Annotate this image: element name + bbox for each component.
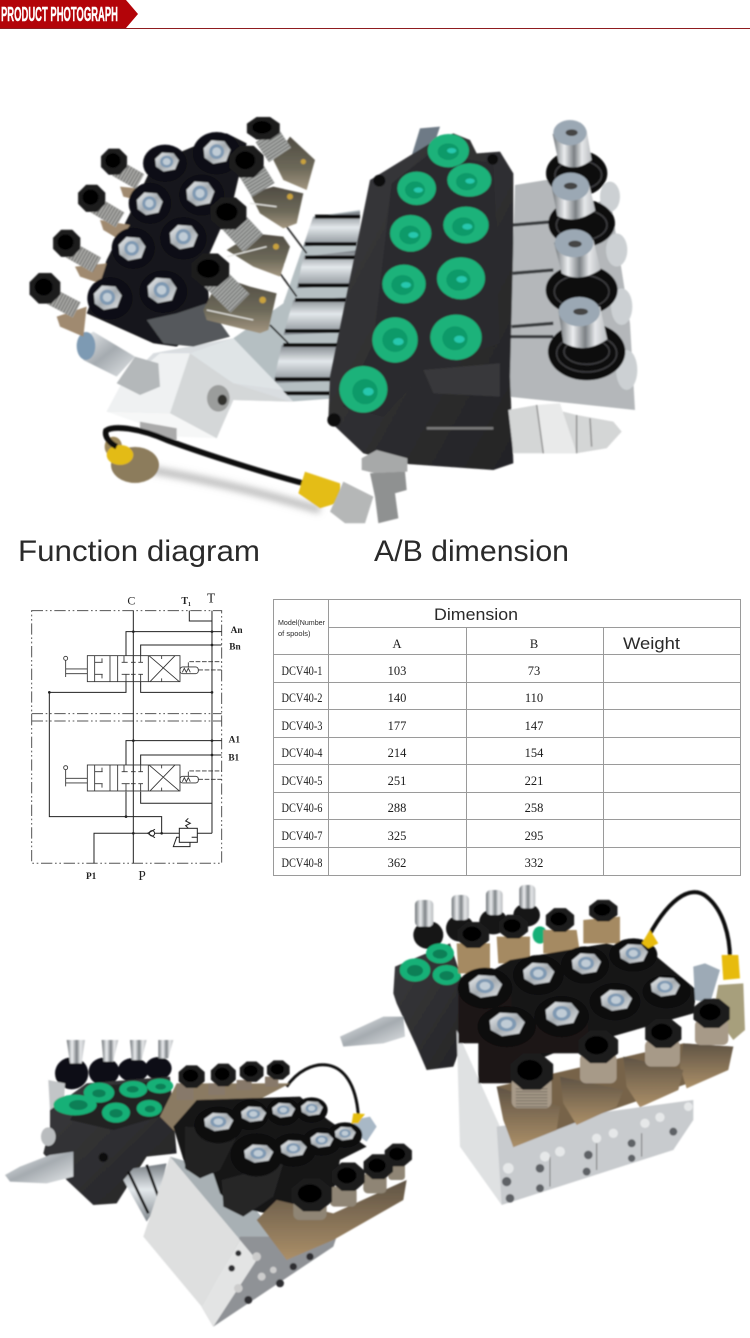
header cells: Weight xyxy=(623,634,680,653)
data rows: DCV40-2 xyxy=(282,691,322,705)
directional valve xyxy=(327,120,637,523)
data rows: 288 xyxy=(388,801,406,815)
data rows xyxy=(282,664,544,870)
cast body xyxy=(43,1077,177,1205)
manifold block xyxy=(457,1030,693,1205)
valve symbol lower xyxy=(64,765,222,791)
spool knobs xyxy=(413,885,540,949)
side bolt xyxy=(340,1017,405,1047)
heading: function diagram: Function diagram xyxy=(18,535,260,568)
spool knobs and rubber boots xyxy=(546,120,625,380)
data rows: DCV40-4 xyxy=(282,746,323,760)
data rows: 154 xyxy=(525,746,544,760)
heading: A/B dimension: A/B dimension xyxy=(374,535,569,568)
dimension table xyxy=(274,600,740,876)
data rows: 325 xyxy=(388,829,406,843)
rear stud xyxy=(408,127,440,167)
data rows: 251 xyxy=(388,774,406,788)
upper connectors xyxy=(457,900,620,973)
manifold block xyxy=(143,1157,337,1327)
side bolt xyxy=(508,403,622,453)
valve symbol upper xyxy=(64,656,222,682)
port labels: P1 xyxy=(86,872,97,882)
header cells: Model(Number xyxy=(278,618,325,627)
port labels: Bn xyxy=(229,643,242,653)
front connectors xyxy=(257,1144,412,1260)
rear connectors xyxy=(160,1060,290,1137)
rods xyxy=(123,1163,167,1222)
data rows: 73 xyxy=(528,664,540,678)
data rows: DCV40-8 xyxy=(282,856,322,870)
table grid xyxy=(274,600,740,876)
left connectors xyxy=(30,149,153,337)
front connectors xyxy=(497,999,733,1147)
yellow fitting xyxy=(298,472,342,508)
right connectors xyxy=(191,117,315,333)
green caps xyxy=(400,926,547,985)
data rows: 177 xyxy=(388,719,406,733)
port labels: T₁ xyxy=(181,596,191,607)
side bolt xyxy=(5,1127,108,1183)
port labels: P xyxy=(138,868,146,883)
data rows: 147 xyxy=(525,719,543,733)
port labels: T xyxy=(207,590,215,605)
data rows: DCV40-3 xyxy=(282,719,322,733)
data rows: DCV40-1 xyxy=(282,664,322,678)
port labels: An xyxy=(231,626,243,636)
hydraulic function diagram xyxy=(32,590,243,883)
outer boundary xyxy=(32,611,222,863)
bottom elbow fitting xyxy=(330,450,407,523)
hose xyxy=(106,428,303,483)
green caps xyxy=(53,1079,173,1123)
data rows: 110 xyxy=(525,691,543,705)
data rows: DCV40-5 xyxy=(282,774,322,788)
header cells: of spools) xyxy=(278,629,311,638)
brass fitting xyxy=(105,437,159,483)
green port caps xyxy=(339,134,491,413)
yellow fittings and plug xyxy=(642,930,745,1040)
cast body xyxy=(393,943,473,1070)
header cells xyxy=(278,605,680,653)
hose shadow xyxy=(133,467,320,510)
data rows: DCV40-7 xyxy=(282,829,322,843)
silver valve sections xyxy=(508,179,637,410)
data rows: 103 xyxy=(388,664,406,678)
port labels: A1 xyxy=(229,735,240,745)
solenoid coils xyxy=(173,1097,367,1217)
solenoid valve assembly xyxy=(30,117,360,510)
data rows: 214 xyxy=(388,746,407,760)
data rows: DCV40-6 xyxy=(282,801,322,815)
header banner: product photograph xyxy=(0,0,750,29)
solenoid coils xyxy=(458,938,697,1083)
main product photo xyxy=(30,117,637,523)
data rows: 362 xyxy=(388,856,406,870)
cast body xyxy=(328,133,513,470)
check and relief valve xyxy=(148,818,197,847)
hose xyxy=(287,1065,358,1115)
lower right product photo xyxy=(340,885,745,1205)
header cells: B xyxy=(530,637,538,651)
data rows: 295 xyxy=(525,829,543,843)
port labels: C xyxy=(127,593,135,607)
hose xyxy=(645,892,730,958)
coil block xyxy=(87,133,247,347)
header cells: Dimension xyxy=(434,605,518,624)
coil caps xyxy=(87,132,241,320)
hydraulic cylinders xyxy=(270,212,360,393)
junction dots xyxy=(48,630,213,835)
header banner: product photograph: PRODUCT PHOTOGRAPH xyxy=(1,4,118,26)
spool knobs xyxy=(55,1040,173,1089)
plug and fitting xyxy=(77,332,160,395)
data rows: 221 xyxy=(525,774,543,788)
port labels: B1 xyxy=(228,754,240,764)
circuit lines xyxy=(49,611,222,863)
plug and yellow fitting xyxy=(352,1113,377,1142)
data rows: 258 xyxy=(525,801,543,815)
port labels xyxy=(86,590,243,883)
header cells: A xyxy=(392,637,402,651)
lower left product photo xyxy=(5,1040,412,1327)
data rows: 140 xyxy=(388,691,406,705)
data rows: 332 xyxy=(525,856,543,870)
aluminium manifold block xyxy=(107,338,290,440)
